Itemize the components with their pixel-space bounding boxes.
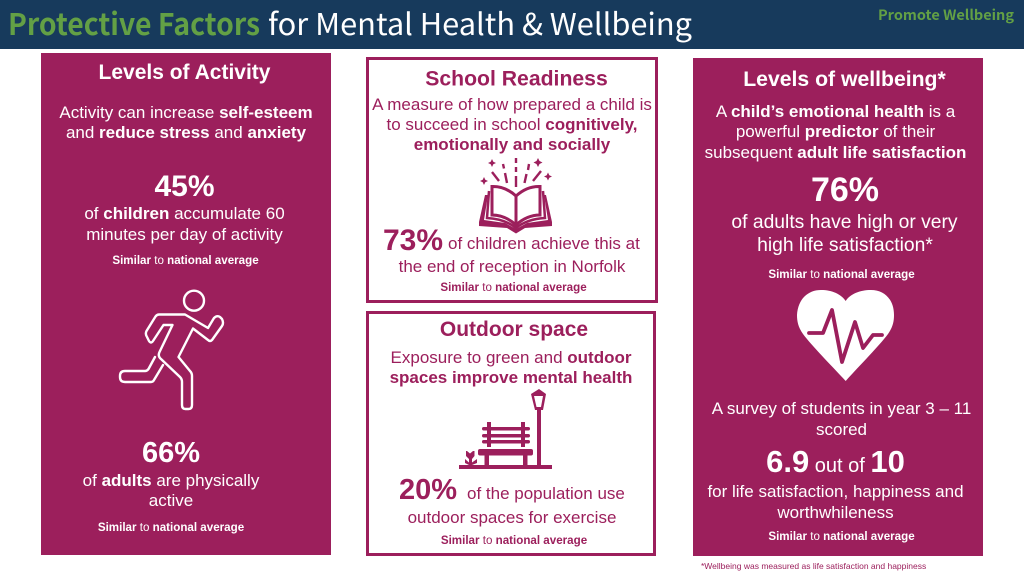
text: student survey: scored [816,420,867,439]
stat: 66 percent of adults: Similar to national average [98,521,245,534]
icon: heart with pulse [797,290,894,381]
panel: levels of wellbeing [693,58,983,556]
stat: 76 percent of adults: high life satisfaction* [757,235,933,256]
stat: 45 percent of children: minutes per day of activity [86,225,283,244]
stat: 76 percent of adults: Similar to national average [768,268,915,281]
stat: 6.9 out of 10: for life satisfaction, happiness and [707,482,964,501]
text: school readiness definition: to succeed in school cognitively, [386,115,638,134]
heading: levels of wellbeing: Levels of wellbeing* [743,68,947,91]
title: Protective Factors [8,0,260,44]
stat: 66 percent of adults: of adults are physically [83,471,259,490]
stat: 20 percent of population: Similar to national average [441,534,588,547]
icon: open book with sparkles [479,158,552,234]
text: activity intro: Activity can increase self-esteem [59,103,313,122]
stat: 20 percent of population: of the population use [467,484,625,503]
text: school readiness definition: emotionally and socially [414,135,611,154]
text: wellbeing intro: powerful predictor of their [736,122,935,141]
stat: 20 percent of population: outdoor spaces for exercise [408,508,616,527]
heading: outdoor space: Outdoor space [440,318,588,341]
stat: 6.9 out of 10: Similar to national average [768,530,915,543]
text: student survey: A survey of students in year 3 – 11 [712,399,971,418]
title: for Mental Health & Wellbeing [268,0,692,44]
text: wellbeing intro: subsequent adult life satisfaction [705,143,966,162]
stat: 76 percent of adults: of adults have high or very [731,212,958,233]
stat: 73 percent of children: 73% [383,224,443,257]
header tag: promote wellbeing: Promote Wellbeing [878,5,1015,25]
text: outdoor space benefit: Exposure to green and outdoor [391,348,631,367]
stat: 73 percent of children: the end of reception in Norfolk [399,257,626,276]
stat: 20 percent of population [399,474,625,547]
stat: 6.9 out of 10 [707,444,964,543]
icon: park bench with lamp and flower [459,389,552,469]
stat: 73 percent of children: Similar to national average [440,281,587,294]
panel: levels of activity [41,53,331,555]
text: outdoor space benefit: spaces improve mental health [390,368,632,387]
stat: 45 percent of children: 45% [154,170,215,203]
stat: 66 percent of adults: active [149,491,193,510]
stat: 76 percent of adults [731,171,958,281]
stat: 45 percent of children: of children accumulate 60 [84,204,285,223]
heading: school readiness: School Readiness [425,68,608,90]
stat: 73 percent of children [383,224,640,294]
stat: 20 percent of population: 20% [399,474,457,506]
text: activity intro: and reduce stress and anxiety [66,123,306,142]
stat: 66 percent of adults [83,437,260,534]
stat: 6.9 out of 10: worthwhileness [776,503,894,522]
heading: levels of activity: Levels of Activity [99,61,271,84]
stat: 76 percent of adults: 76% [811,171,879,209]
icon: running person [120,291,223,409]
text: school readiness definition: A measure of how prepared a child is [372,95,652,114]
header banner [0,0,1024,49]
text: wellbeing intro: A child’s emotional health is a [716,102,955,121]
title [8,0,692,44]
panel: school readiness [368,58,656,302]
stat: 6.9 out of 10: 6.9 out of 10 [766,444,905,479]
stat: 66 percent of adults: 66% [142,437,200,469]
footnote: *Wellbeing was measured as life satisfaction and happiness [701,561,926,571]
stat: 73 percent of children: of children achieve this at [448,234,640,253]
stat: 45 percent of children [84,170,285,267]
panel: outdoor space [368,312,654,554]
stat: 45 percent of children: Similar to national average [112,254,259,267]
